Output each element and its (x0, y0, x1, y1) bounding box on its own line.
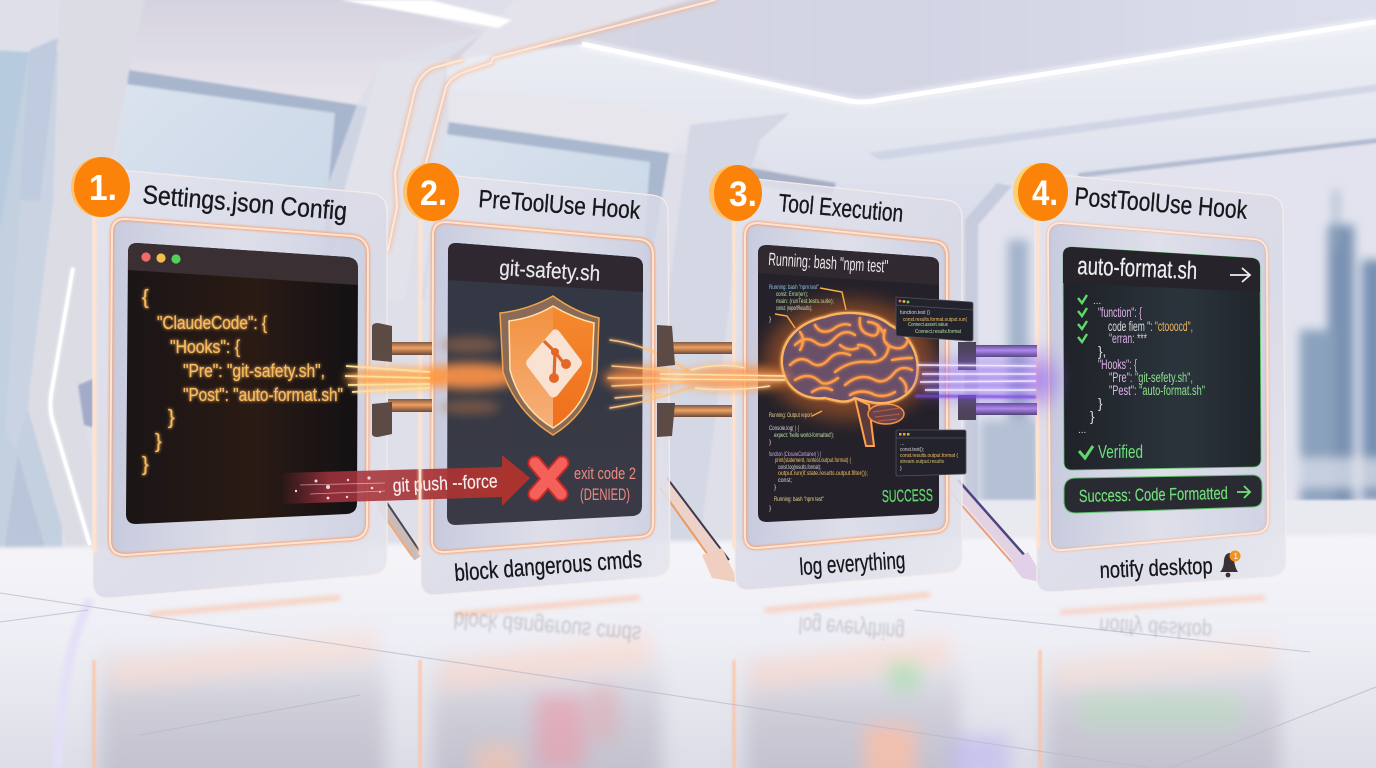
terminal log lines: } (769, 316, 772, 323)
terminal log lines: const; (778, 477, 792, 484)
floor with reflections (0, 535, 1376, 768)
heading: Tool Execution (777, 189, 904, 228)
neon frame (110, 219, 368, 555)
connector pegs between step 1 and 2 (372, 323, 432, 437)
formatted code: ... (1093, 296, 1101, 307)
floating window bottom: const.test(); (900, 447, 924, 453)
panel: step 1 settings config (93, 169, 387, 598)
ceiling panel left (129, 0, 484, 105)
violet energy beam from step 3 to step 4 (915, 348, 1058, 412)
window title bar (128, 243, 358, 285)
floating window top (896, 297, 973, 341)
terminal log lines: output.run(if.state.results.output.filter()); (778, 470, 868, 477)
neon edge (1037, 222, 1039, 548)
neon frame (745, 223, 947, 548)
orange energy beam from step 1 to step 2 (345, 366, 445, 392)
step badge 1 (71, 157, 130, 217)
icon: check list (1078, 295, 1087, 342)
terminal log lines: Running: bash "npm test" (774, 496, 824, 503)
floating window top: Connect.results.format (915, 329, 961, 335)
orange energy beam from step 2 to step 3 (660, 365, 790, 390)
formatted code: } (1098, 396, 1103, 411)
exit code text: exit code 2 (574, 464, 636, 483)
step badge 3: 3. (729, 175, 757, 214)
callout leader lines (775, 288, 846, 416)
terminal log lines: const.log(results.format); (778, 464, 821, 471)
wall band under light strip (446, 22, 1376, 300)
step badge 4 (1013, 163, 1068, 221)
exit code text (574, 464, 636, 504)
json code: "ClaudeCode": { (157, 313, 267, 333)
json code: "Pre": "git-safety.sh", (183, 361, 325, 381)
step badge 1: 1. (89, 167, 117, 208)
json code (142, 287, 343, 476)
formatted code: "Pest": "auto-format.sh" (1109, 383, 1205, 398)
window one (100, 70, 357, 300)
card body (421, 174, 670, 595)
terminal screen (758, 245, 939, 522)
terminal log lines: const: (reportResults); (776, 305, 812, 312)
sparks right of shield (604, 340, 695, 408)
formatted code: } (1090, 409, 1095, 424)
blurred skyline (980, 190, 1376, 505)
reflected captions (453, 606, 1213, 648)
neon edge (94, 215, 96, 553)
icon: glowing brain (765, 300, 935, 446)
step badge 3 (709, 165, 762, 221)
struts between cards (378, 478, 1040, 582)
json code: "Post": "auto-format.sh" (183, 385, 343, 405)
icon: notification bell (1220, 550, 1240, 577)
card body (733, 178, 962, 590)
terminal log lines: function (ClosureContainer( ) { (769, 451, 821, 458)
step badge 2 (403, 163, 459, 221)
third pillar (660, 113, 790, 540)
reflected neon edges (94, 650, 1040, 768)
caption: notify desktop (1099, 552, 1213, 583)
terminal title bar (758, 245, 939, 285)
caption: log everything (799, 547, 906, 581)
caption: block dangerous cmds (453, 546, 643, 587)
wall base (960, 500, 1376, 545)
step badge 4: 4. (1032, 174, 1058, 213)
json code: } (168, 407, 175, 429)
neon edge (419, 220, 421, 555)
orange beam behind shield (420, 337, 520, 414)
json code: } (142, 454, 149, 476)
panel: step 2 pretooluse hook (280, 174, 695, 595)
floating window top: function.test () (900, 310, 930, 316)
reflection bands of the cards (100, 630, 1280, 768)
terminal log lines (769, 284, 868, 512)
formatted code: "Hooks": { (1098, 357, 1137, 372)
icon: header arrow (1230, 268, 1250, 282)
neon frame (432, 222, 653, 552)
verified status (1079, 442, 1143, 462)
window two (420, 122, 669, 300)
json code: "Hooks": { (170, 337, 240, 357)
icon: notification bell: 1 (1234, 552, 1238, 561)
success pill: Success: Code Formatted (1079, 483, 1228, 506)
traffic lights (141, 252, 181, 264)
icon: shield with git logo (500, 296, 599, 435)
terminal log lines: Console.log( ) { (769, 425, 800, 432)
json code: { (142, 287, 149, 309)
formatted code: }, (1098, 344, 1106, 359)
ceiling right of first bay (446, 0, 1376, 103)
terminal log lines: print(statement, runtest.output.format) { (775, 457, 852, 464)
success pill (1064, 475, 1262, 513)
script title bar (1063, 247, 1260, 292)
formatted code: "Pre": "git-sefety.sh", (1109, 370, 1193, 385)
step badge 2: 2. (420, 174, 447, 213)
right window (965, 137, 1376, 505)
heading: PreToolUse Hook (478, 185, 642, 225)
terminal log lines: main: (runTest.tests.suite); (776, 298, 834, 305)
verified status: Verified (1098, 442, 1143, 462)
neon frame (1048, 223, 1268, 550)
far-left window (0, 50, 29, 230)
rejected command arrow (280, 455, 530, 506)
script screen (447, 243, 643, 525)
floating window bottom: stream.output.results (900, 459, 944, 465)
exit code text: (DENIED) (580, 485, 630, 504)
running command: Running: bash "npm test" (768, 249, 889, 277)
formatted code: ... (1078, 425, 1086, 436)
floating window top: Connect.assert.value (908, 322, 948, 328)
reflected captions: log everything (798, 611, 905, 645)
neon edge (733, 222, 735, 548)
card body (1035, 174, 1286, 592)
formatted code: "erran: *** (1109, 331, 1147, 346)
connector pegs between step 2 and 3 (657, 325, 732, 437)
floor tile seams (0, 593, 1376, 768)
left pillar light strip (50, 268, 90, 545)
success label: SUCCESS (882, 486, 933, 506)
blurred architecture (0, 0, 1376, 548)
second pillar (326, 105, 380, 300)
formatted code: "function": { (1098, 305, 1142, 320)
formatted code: code fiem ": "ctooocd", (1108, 319, 1193, 334)
terminal log lines: const: Error(err); (776, 291, 808, 298)
rejected command arrow: git push --force (392, 471, 498, 497)
heading: Settings.json Config (141, 179, 348, 226)
terminal log lines: Running: Output report (769, 412, 812, 419)
ceiling light strip two (582, 22, 1376, 102)
terminal log lines: Running: bash "npm test" (769, 284, 819, 291)
icon: red cross (535, 463, 562, 494)
ceiling light strip one (340, 0, 512, 28)
terminal log lines: } (774, 484, 777, 491)
script title bar (448, 243, 643, 292)
floating window bottom: ... (900, 441, 905, 447)
ceiling orange neon lines (388, 0, 715, 250)
script screen (1063, 247, 1261, 470)
floating window top: const.results.format.output.run( (903, 317, 967, 323)
reflected captions: notify desktop (1098, 613, 1213, 644)
heading: PostToolUse Hook (1074, 181, 1249, 225)
terminal log lines: } (769, 439, 772, 446)
reflected captions: block dangerous cmds (453, 606, 642, 648)
floating window bottom: } (900, 466, 902, 472)
terminal log lines: expect: 'hello world-formatted'}; (774, 432, 834, 439)
connector pegs between step 3 and 4 (958, 342, 1037, 420)
panel: step 4 posttooluse hook (1035, 174, 1286, 592)
code screen (126, 243, 358, 524)
script name: auto-format.sh (1077, 252, 1198, 285)
floating window bottom (896, 430, 966, 476)
script name: git-safety.sh (499, 255, 601, 286)
floating window bottom: const.results.output.format { (900, 453, 958, 459)
left pillar (5, 55, 75, 450)
formatted code (1078, 296, 1205, 436)
panel: step 3 tool execution (733, 178, 973, 590)
terminal log lines: } (769, 505, 772, 512)
card body (93, 169, 387, 598)
json code: } (155, 431, 162, 453)
